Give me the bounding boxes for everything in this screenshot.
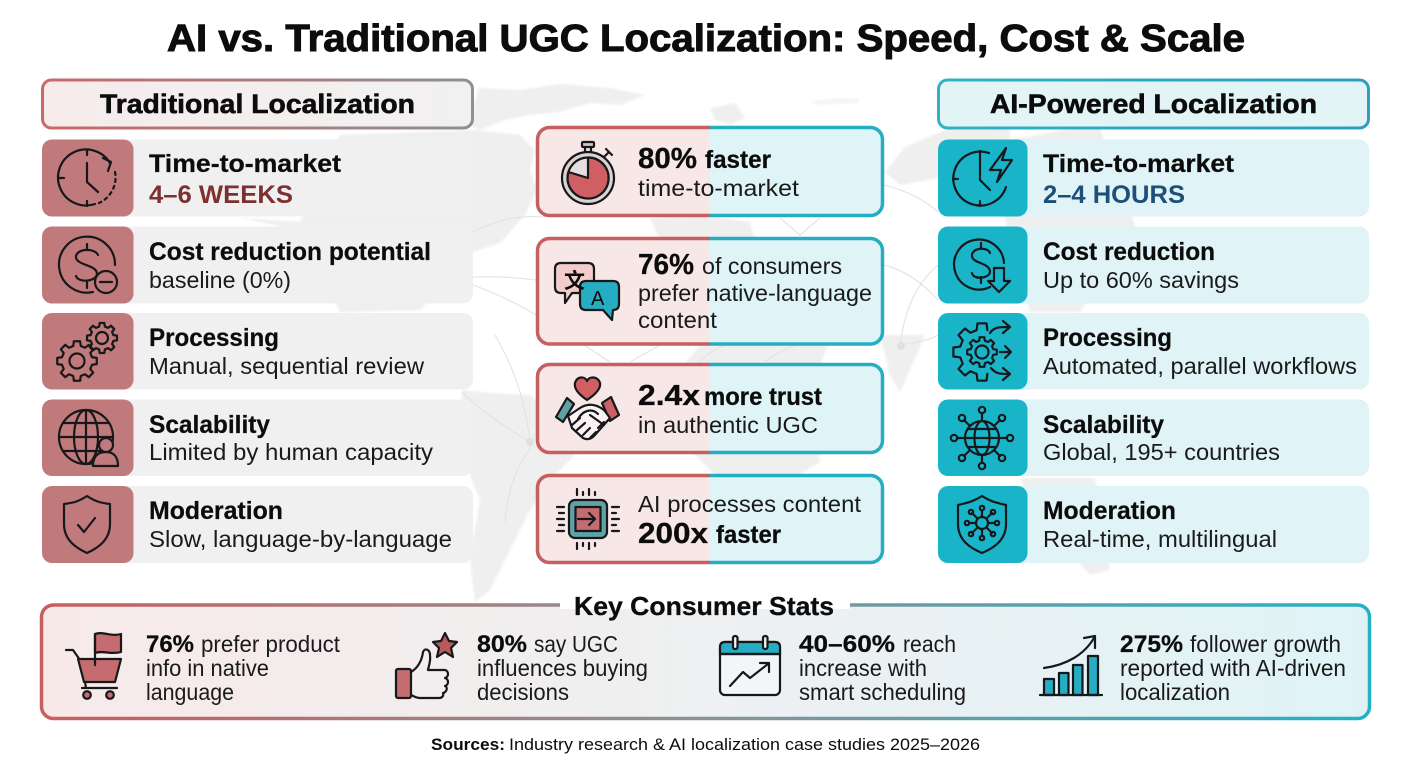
stat: 275% follower growth: localization xyxy=(1120,679,1230,705)
row: traditional time-to-market: Time-to-market xyxy=(149,150,342,178)
card: 80% faster xyxy=(538,128,882,216)
card: 76% of consumers: content xyxy=(638,307,717,333)
card: 76% of consumers: of consumers xyxy=(702,253,842,279)
card: 2.4x more trust: in authentic UGC xyxy=(638,412,818,438)
card: 80% faster: time-to-market xyxy=(638,175,799,201)
row: AI moderation xyxy=(938,486,1369,563)
row: traditional processing xyxy=(42,313,473,390)
card: 76% of consumers: 文 xyxy=(564,269,585,293)
row: traditional scalability: Limited by human capacity xyxy=(149,439,433,465)
panel: key consumer stats xyxy=(42,591,1370,718)
card: 80% faster: faster xyxy=(705,146,771,174)
card: 76% of consumers: A xyxy=(591,288,605,310)
row: AI scalability xyxy=(938,400,1369,476)
heading: key consumer stats: Key Consumer Stats xyxy=(574,591,834,621)
row: traditional moderation: Slow, language-by-language xyxy=(149,526,452,552)
stat: 275% follower growth: reported with AI-driven xyxy=(1120,655,1346,681)
stat: 275% follower growth: follower growth xyxy=(1190,631,1341,657)
stat: 76% prefer product info xyxy=(66,631,340,705)
stat: 275% follower growth: 275% xyxy=(1120,631,1183,658)
stat: 275% follower growth xyxy=(1040,631,1346,705)
row: AI moderation: Real-time, multilingual xyxy=(1043,526,1277,552)
row: AI scalability: Global, 195+ countries xyxy=(1043,439,1280,465)
stat: 40-60% reach: reach xyxy=(903,631,956,657)
row: AI moderation: Moderation xyxy=(1043,497,1176,525)
stat: 76% prefer product info: prefer product xyxy=(201,631,340,657)
card: 200x faster: 200x xyxy=(638,518,708,550)
heading: AI-powered localization xyxy=(938,80,1368,128)
row: AI cost reduction: Up to 60% savings xyxy=(1043,267,1239,293)
heading: AI-powered localization: AI-Powered Localization xyxy=(990,89,1317,119)
row: AI time-to-market: Time-to-market xyxy=(1043,150,1235,178)
stat: 76% prefer product info: 76% xyxy=(146,631,194,658)
stat: 80% say UGC: influences buying xyxy=(477,655,648,681)
panel: traditional localization column xyxy=(42,80,473,563)
sources footnote: Industry research & AI localization case studies 2025–2026 xyxy=(509,736,980,754)
row: traditional time-to-market xyxy=(42,140,473,216)
row: AI time-to-market: 2–4 HOURS xyxy=(1043,181,1185,209)
card: 2.4x more trust xyxy=(538,364,882,452)
stat: 76% prefer product info: language xyxy=(146,679,234,705)
card: 200x faster xyxy=(538,476,882,562)
row: traditional moderation: Moderation xyxy=(149,497,283,525)
panel: AI-powered localization column xyxy=(938,80,1369,563)
row: traditional processing: Manual, sequential review xyxy=(149,353,425,379)
card: 200x faster: AI processes content xyxy=(638,491,861,517)
stat: 40-60% reach xyxy=(720,631,966,705)
card: 80% faster: 80% xyxy=(638,143,697,175)
row: AI processing: Automated, parallel workflows xyxy=(1043,353,1357,379)
row: traditional cost reduction: Cost reduction potential xyxy=(149,238,431,266)
row: AI time-to-market xyxy=(938,140,1369,216)
stat: 76% prefer product info: info in native xyxy=(146,655,269,681)
card: 76% of consumers: prefer native-language xyxy=(638,280,872,306)
stat: 80% say UGC: decisions xyxy=(477,679,569,705)
row: traditional scalability: Scalability xyxy=(149,411,270,439)
row: AI processing xyxy=(938,313,1369,390)
background world map xyxy=(240,84,1135,602)
stat: 80% say UGC: 80% xyxy=(477,631,527,658)
stat: 40-60% reach: 40–60% xyxy=(799,631,895,658)
row: traditional processing: Processing xyxy=(149,324,279,352)
row: AI processing: Processing xyxy=(1043,324,1172,352)
row: traditional cost reduction: baseline (0%) xyxy=(149,267,291,293)
title: AI vs. Traditional UGC Localization: Speed, Cost & Scale xyxy=(167,18,1245,60)
heading: traditional localization xyxy=(42,80,472,128)
row: AI cost reduction: Cost reduction xyxy=(1043,238,1215,266)
card: 2.4x more trust: more trust xyxy=(704,383,823,411)
stat: 40-60% reach: increase with xyxy=(799,655,927,681)
row: traditional moderation xyxy=(42,486,473,563)
stat: 80% say UGC xyxy=(396,631,648,705)
row: traditional cost reduction xyxy=(42,226,473,304)
card: 76% of consumers xyxy=(538,238,882,344)
panel: central comparison stats xyxy=(538,128,882,562)
card: 2.4x more trust: 2.4x xyxy=(638,380,700,412)
row: AI scalability: Scalability xyxy=(1043,411,1164,439)
row: traditional scalability xyxy=(42,400,473,476)
row: AI cost reduction xyxy=(938,226,1369,304)
row: traditional time-to-market: 4–6 WEEKS xyxy=(149,181,293,209)
stat: 40-60% reach: smart scheduling xyxy=(799,679,966,705)
stat: 80% say UGC: say UGC xyxy=(534,631,618,657)
sources footnote: Sources: xyxy=(431,736,505,754)
card: 200x faster: faster xyxy=(716,521,781,549)
heading: traditional localization: Traditional Localization xyxy=(100,89,415,119)
card: 76% of consumers: 76% xyxy=(638,249,694,281)
